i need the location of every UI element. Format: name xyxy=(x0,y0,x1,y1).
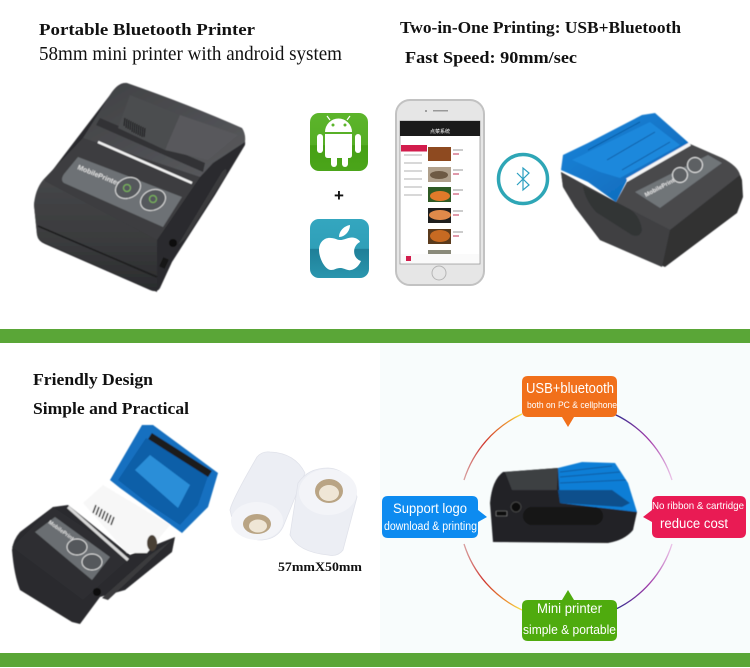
black printer photo: MobilePrinter xyxy=(76,164,121,188)
black printer photo xyxy=(34,83,245,292)
callout: mini printer: simple & portable xyxy=(523,623,616,637)
open printer with paper roll photo xyxy=(12,425,218,624)
heading: friendly design: Simple and Practical xyxy=(33,399,189,418)
blue lid printer photo xyxy=(561,113,743,267)
heading: two-in-one printing xyxy=(400,18,682,67)
callout: mini printer: Mini printer xyxy=(537,601,602,616)
plus sign: + xyxy=(334,186,344,205)
green divider band bottom xyxy=(0,653,750,667)
smartphone with food menu app: 点菜系统 xyxy=(430,128,450,135)
heading: portable bluetooth printer: Portable Bluetooth Printer xyxy=(39,20,256,39)
callout: usb bluetooth: USB+bluetooth xyxy=(526,380,614,397)
rainbow circle ring xyxy=(464,414,672,610)
heading: friendly design xyxy=(33,370,189,418)
side view printer photo xyxy=(490,462,637,543)
heading: friendly design: Friendly Design xyxy=(33,370,154,389)
icon: android xyxy=(310,113,368,171)
callout: support logo xyxy=(382,496,487,538)
green divider band top xyxy=(0,329,750,343)
icon: bluetooth circle xyxy=(498,154,548,204)
heading: two-in-one printing: Fast Speed: 90mm/sec xyxy=(405,48,577,67)
callout: support logo: Support logo xyxy=(393,500,467,516)
label: roll size: 57mmX50mm xyxy=(278,559,362,574)
heading: portable bluetooth printer: 58mm mini printer with android system xyxy=(39,43,342,65)
callout: usb bluetooth: both on PC & cellphone xyxy=(527,400,617,411)
right panel background xyxy=(380,343,750,654)
heading: two-in-one printing: Two-in-One Printing: USB+Bluetooth xyxy=(400,18,682,37)
callout: mini printer xyxy=(522,590,617,641)
heading: portable bluetooth printer xyxy=(39,20,342,65)
callout: usb bluetooth xyxy=(522,376,617,427)
callout: support logo: download & printing xyxy=(384,521,477,533)
smartphone with food menu app xyxy=(396,100,484,285)
callout: no ribbon xyxy=(643,496,746,538)
blue lid printer photo: MobilePrinter xyxy=(644,175,681,199)
open printer with paper roll photo: MobilePrinter xyxy=(47,520,79,546)
callout: no ribbon: reduce cost xyxy=(660,516,728,531)
callout: no ribbon: No ribbon & cartridge xyxy=(652,500,744,512)
paper rolls xyxy=(230,452,357,555)
icon: apple xyxy=(310,219,369,278)
